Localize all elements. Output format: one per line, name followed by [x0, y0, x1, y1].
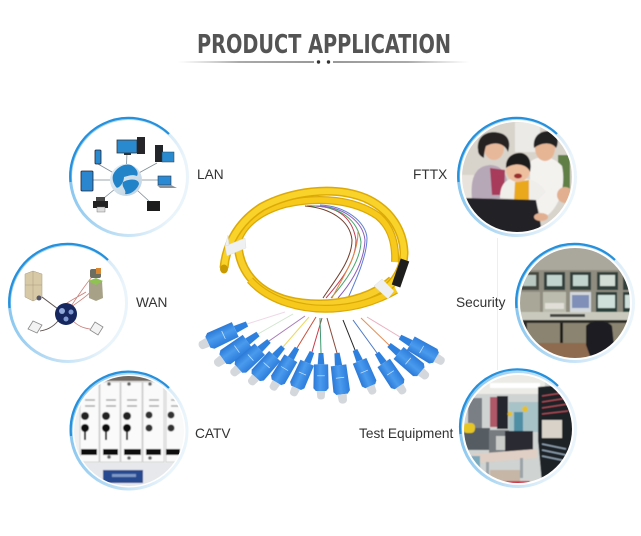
- CATV ring: [71, 372, 187, 489]
- WAN network icons: [25, 268, 103, 335]
- label: LAN: LAN: [197, 167, 224, 182]
- SC connectors: [195, 316, 448, 405]
- panel: WAN: [9, 244, 127, 362]
- control room photo: [520, 248, 630, 358]
- panel: Security: [515, 244, 635, 363]
- panel: CATV: [70, 372, 190, 493]
- panel: FTTX: [458, 118, 576, 236]
- family photo: [460, 120, 575, 236]
- heat shrink sleeve: [396, 260, 405, 286]
- title divider: [178, 60, 469, 64]
- Test Equipment ring: [460, 369, 576, 486]
- label: WAN: WAN: [136, 295, 167, 310]
- Security ring: [516, 244, 634, 362]
- FTTX ring: [458, 118, 576, 236]
- WAN ring: [9, 244, 127, 362]
- LAN ring: [70, 118, 188, 236]
- label: CATV: CATV: [195, 426, 231, 441]
- title: PRODUCT APPLICATION: [197, 30, 451, 60]
- label: FTTX: FTTX: [413, 167, 447, 182]
- coiled fibers: [305, 205, 367, 298]
- label: Test Equipment: Test Equipment: [359, 426, 454, 441]
- yellow jacket cable: [224, 191, 404, 309]
- panel: Test Equipment: [460, 369, 578, 488]
- fibers to connectors: [247, 312, 400, 353]
- label: Security: Security: [456, 295, 506, 310]
- cable open end: [220, 264, 228, 274]
- LAN network icons: [81, 137, 177, 212]
- lab photo: [464, 375, 572, 483]
- CATV rack photo: [74, 376, 180, 486]
- fiber pigtail product: [195, 191, 448, 405]
- panel: LAN: [70, 118, 188, 236]
- tape bands: [225, 235, 394, 299]
